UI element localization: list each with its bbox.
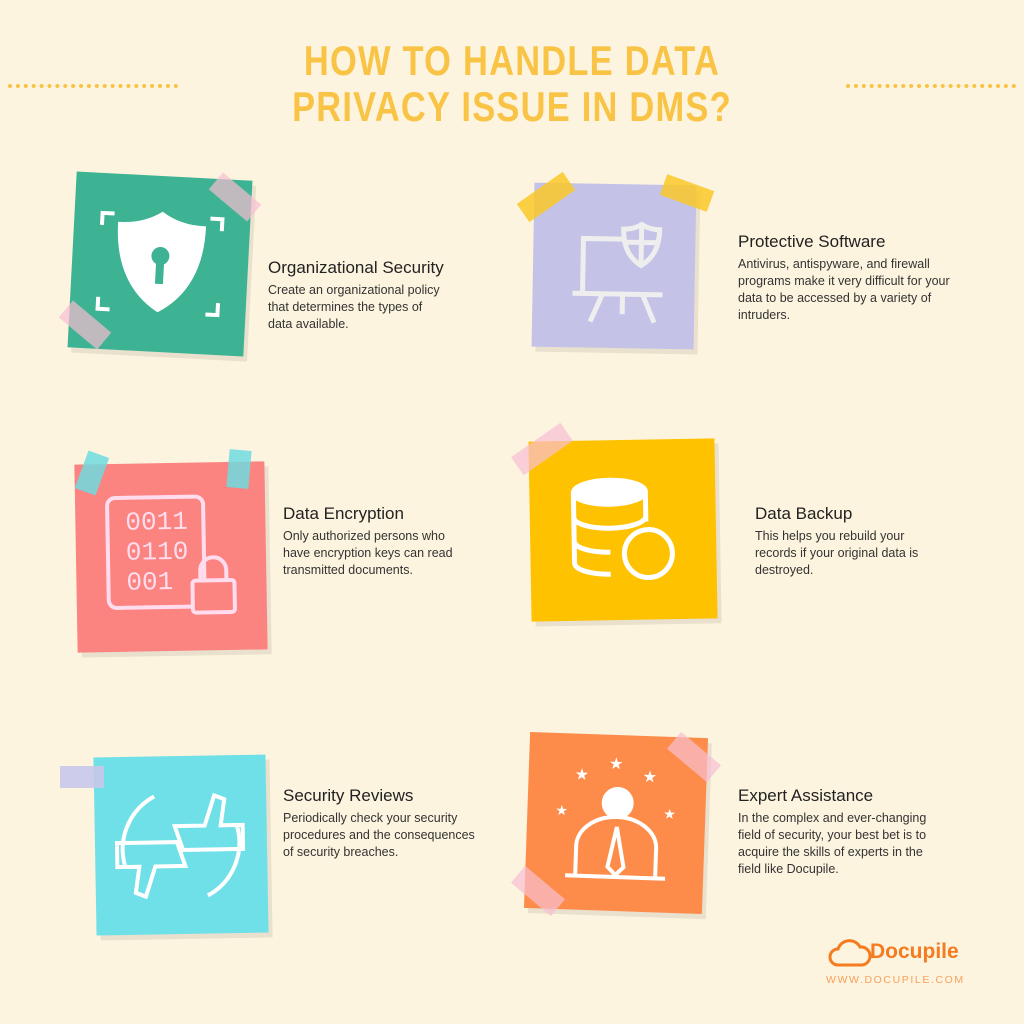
icon: cloud (828, 939, 872, 966)
text: data encryption (283, 504, 453, 577)
text: organizational security (268, 258, 444, 331)
icon: expert: ★ (574, 767, 589, 784)
text: security reviews: Security Reviews (283, 786, 413, 805)
icon: expert: ★ (642, 769, 657, 786)
text: data backup: Data Backup (755, 504, 852, 523)
logo: docupile: Docupile (870, 940, 959, 963)
panel: protective software note (532, 183, 696, 349)
text: organizational security: Create an organizational policy that determines the types of data available. (268, 283, 440, 331)
icon: binary lock (105, 494, 237, 615)
icon: thumbs (114, 792, 246, 900)
panel: data encryption note (74, 461, 268, 653)
text: security reviews: Periodically check your security procedures and the consequences of security breaches. (283, 811, 475, 859)
icon: database (570, 478, 675, 580)
icon: expert (555, 756, 676, 881)
icon: binary lock: 0011 (125, 507, 188, 538)
text: data backup (755, 504, 918, 577)
icon: shield (96, 210, 224, 318)
icon: binary lock: 001 (126, 567, 174, 598)
text: protective software: Protective Software (738, 232, 885, 251)
text: expert assistance: In the complex and ever-changing field of security, your best bet is to acquire the skills of experts in the field like Docupile. (738, 811, 926, 876)
icon: expert: ★ (609, 756, 624, 773)
text: data encryption: Only authorized persons who have encryption keys can read transmitted documents. (283, 529, 453, 577)
icon: monitor shield (572, 222, 662, 324)
title (292, 37, 732, 130)
title: HOW TO HANDLE DATA (304, 37, 720, 84)
panel: expert assistance note (524, 732, 708, 914)
text: protective software: Antivirus, antispyware, and firewall programs make it very difficult for your data to be accessed by a variety of intruders. (738, 257, 950, 322)
title: PRIVACY ISSUE IN DMS? (292, 83, 732, 130)
panel: security reviews note (93, 755, 269, 935)
logo: docupile: WWW.DOCUPILE.COM (826, 974, 965, 986)
icon: expert: ★ (555, 802, 568, 818)
panel: organizational security note (68, 172, 252, 356)
logo: docupile (826, 939, 965, 986)
text: security reviews (283, 786, 475, 859)
panel: data backup note (528, 438, 718, 622)
text: data backup: This helps you rebuild your records if your original data is destroyed. (755, 529, 918, 577)
text: data encryption: Data Encryption (283, 504, 404, 523)
icon: binary lock: 0110 (126, 537, 189, 568)
text: organizational security: Organizational Security (268, 258, 444, 277)
icon: expert: ★ (663, 806, 676, 822)
text: expert assistance: Expert Assistance (738, 786, 873, 805)
